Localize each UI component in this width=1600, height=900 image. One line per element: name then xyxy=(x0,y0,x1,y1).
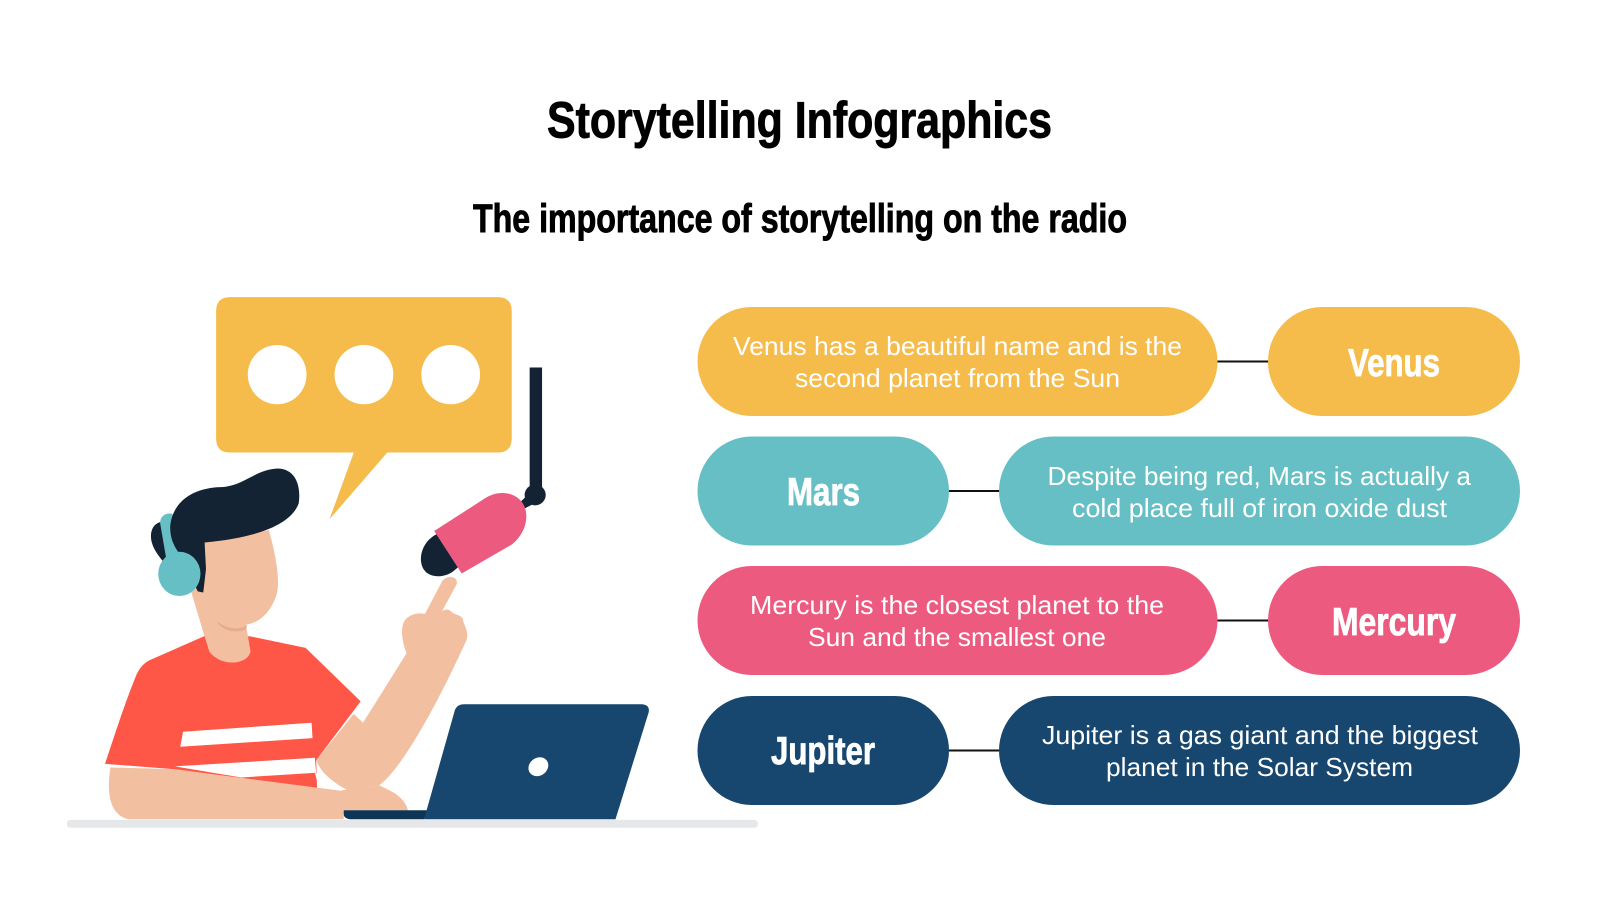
description pill xyxy=(999,436,1520,546)
row: Mercury xyxy=(698,566,1520,675)
label pill: Venus xyxy=(1348,342,1440,385)
back hair xyxy=(151,522,182,566)
label pill xyxy=(1268,566,1520,675)
speech bubble xyxy=(216,297,512,519)
description pill xyxy=(698,566,1218,675)
label pill: Mars xyxy=(787,471,860,514)
hair xyxy=(170,469,299,592)
connector xyxy=(1217,360,1269,362)
face and neck xyxy=(189,530,278,663)
laptop xyxy=(344,704,649,819)
connector xyxy=(1217,620,1269,622)
subtitle: The importance of storytelling on the radio xyxy=(473,197,1127,241)
connector xyxy=(948,490,1000,492)
microphone xyxy=(421,367,546,576)
description pill: Mercury is the closest planet to the xyxy=(750,590,1164,620)
ground shadow xyxy=(67,820,758,828)
label pill xyxy=(1268,307,1520,416)
label pill xyxy=(698,436,949,546)
left arm and raised hand xyxy=(109,577,467,819)
description pill: Venus has a beautiful name and is the xyxy=(733,331,1182,361)
description pill: Jupiter is a gas giant and the biggest xyxy=(1042,720,1479,750)
headphone band xyxy=(160,513,180,560)
description pill xyxy=(698,307,1218,416)
title: Storytelling Infographics xyxy=(547,92,1052,148)
row: Jupiter xyxy=(698,696,1520,805)
headphone ear cup xyxy=(158,552,200,596)
shirt xyxy=(105,636,361,790)
label pill: Jupiter xyxy=(771,730,875,773)
connector xyxy=(948,750,1000,752)
description pill: Despite being red, Mars is actually a xyxy=(1048,461,1472,491)
description pill: cold place full of iron oxide dust xyxy=(1072,493,1448,523)
illustration: radio host at laptop xyxy=(67,297,758,828)
row: Mars xyxy=(698,436,1520,546)
description pill: second planet from the Sun xyxy=(795,363,1120,393)
label pill xyxy=(698,696,949,805)
description pill: Sun and the smallest one xyxy=(808,622,1106,652)
row: Venus xyxy=(698,307,1520,416)
description pill: planet in the Solar System xyxy=(1106,752,1413,782)
label pill: Mercury xyxy=(1332,601,1456,644)
description pill xyxy=(999,696,1520,805)
